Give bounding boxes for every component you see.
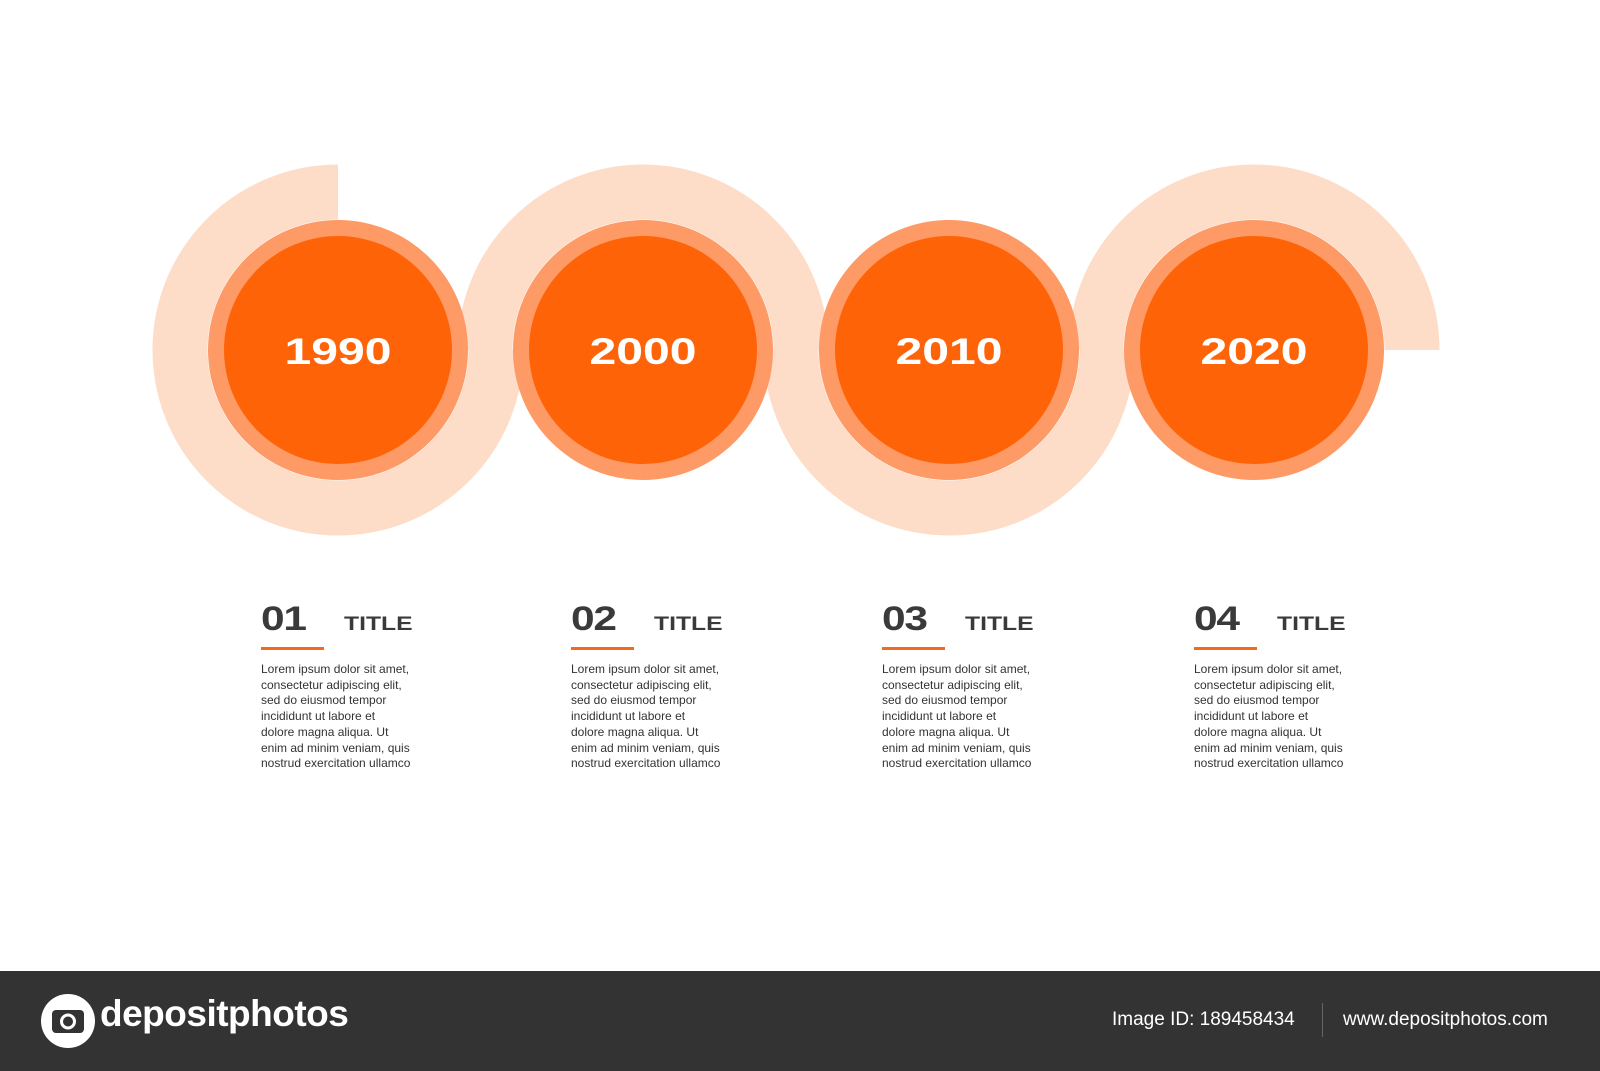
text block 03: dolore magna aliqua. Ut — [882, 725, 1009, 739]
text block 01: Lorem ipsum dolor sit amet, — [261, 662, 409, 676]
text block 02: consectetur adipiscing elit, — [571, 678, 712, 692]
text block 04: 04 — [1194, 600, 1239, 638]
circle 1990 — [208, 220, 468, 480]
text block 03: Lorem ipsum dolor sit amet, — [882, 662, 1030, 676]
text block 03 — [882, 600, 1034, 770]
icon: camera logo — [41, 994, 95, 1048]
text block 01 — [261, 600, 413, 770]
image id: Image ID: 189458434 — [1112, 1009, 1295, 1030]
text block 03: sed do eiusmod tempor — [882, 693, 1007, 707]
text block 03: TITLE — [965, 614, 1034, 635]
text block 01: TITLE — [344, 614, 413, 635]
text block 04: enim ad minim veniam, quis — [1194, 741, 1343, 755]
text block 04: dolore magna aliqua. Ut — [1194, 725, 1321, 739]
text block 03: nostrud exercitation ullamco — [882, 756, 1031, 770]
text block 03: enim ad minim veniam, quis — [882, 741, 1031, 755]
website: www.depositphotos.com — [1343, 1009, 1548, 1030]
text block 02: incididunt ut labore et — [571, 709, 685, 723]
text block 02: enim ad minim veniam, quis — [571, 741, 720, 755]
text block 04 — [1194, 600, 1346, 770]
text block 02: sed do eiusmod tempor — [571, 693, 696, 707]
text block 04: incididunt ut labore et — [1194, 709, 1308, 723]
text block 04: nostrud exercitation ullamco — [1194, 756, 1343, 770]
circle 1990: 1990 — [285, 331, 391, 373]
brand name: depositphotos — [100, 993, 348, 1034]
text block 01: dolore magna aliqua. Ut — [261, 725, 388, 739]
text block 03: consectetur adipiscing elit, — [882, 678, 1023, 692]
text block 01: 01 — [261, 600, 306, 638]
circle 2020 — [1124, 220, 1384, 480]
text block 04: Lorem ipsum dolor sit amet, — [1194, 662, 1342, 676]
circle 2020: 2020 — [1201, 331, 1307, 373]
text block 04: sed do eiusmod tempor — [1194, 693, 1319, 707]
text block 01: nostrud exercitation ullamco — [261, 756, 410, 770]
text block 03: incididunt ut labore et — [882, 709, 996, 723]
circle 2000 — [513, 220, 773, 480]
text block 01: consectetur adipiscing elit, — [261, 678, 402, 692]
circle 2010 — [819, 220, 1079, 480]
text block 02: 02 — [571, 600, 616, 638]
circle 2000: 2000 — [590, 331, 696, 373]
text block 01: incididunt ut labore et — [261, 709, 375, 723]
text block 02: nostrud exercitation ullamco — [571, 756, 720, 770]
circle 2010: 2010 — [896, 331, 1002, 373]
text block 02 — [571, 600, 723, 770]
text block 02: Lorem ipsum dolor sit amet, — [571, 662, 719, 676]
text block 01: sed do eiusmod tempor — [261, 693, 386, 707]
text block 01: enim ad minim veniam, quis — [261, 741, 410, 755]
text block 02: dolore magna aliqua. Ut — [571, 725, 698, 739]
text block 04: TITLE — [1277, 614, 1346, 635]
footer bar — [0, 971, 1600, 1071]
text block 02: TITLE — [654, 614, 723, 635]
text block 03: 03 — [882, 600, 927, 638]
text block 04: consectetur adipiscing elit, — [1194, 678, 1335, 692]
